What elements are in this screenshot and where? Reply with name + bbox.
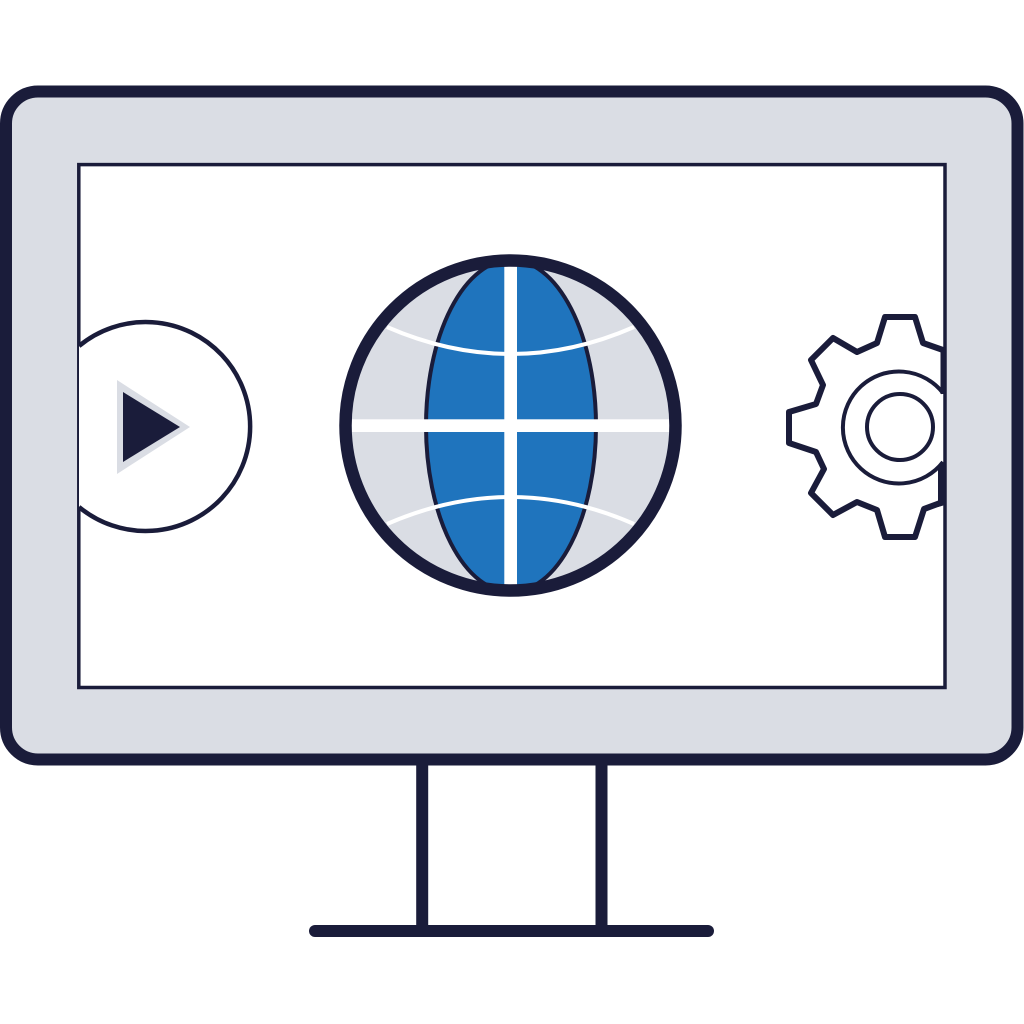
icon: globe [345, 255, 677, 597]
panel: monitor screen [79, 165, 945, 688]
panel: monitor bezel [6, 92, 1018, 760]
icon: gear [789, 317, 945, 537]
icon: monitor stand [315, 760, 708, 931]
icon: play button [79, 322, 250, 531]
